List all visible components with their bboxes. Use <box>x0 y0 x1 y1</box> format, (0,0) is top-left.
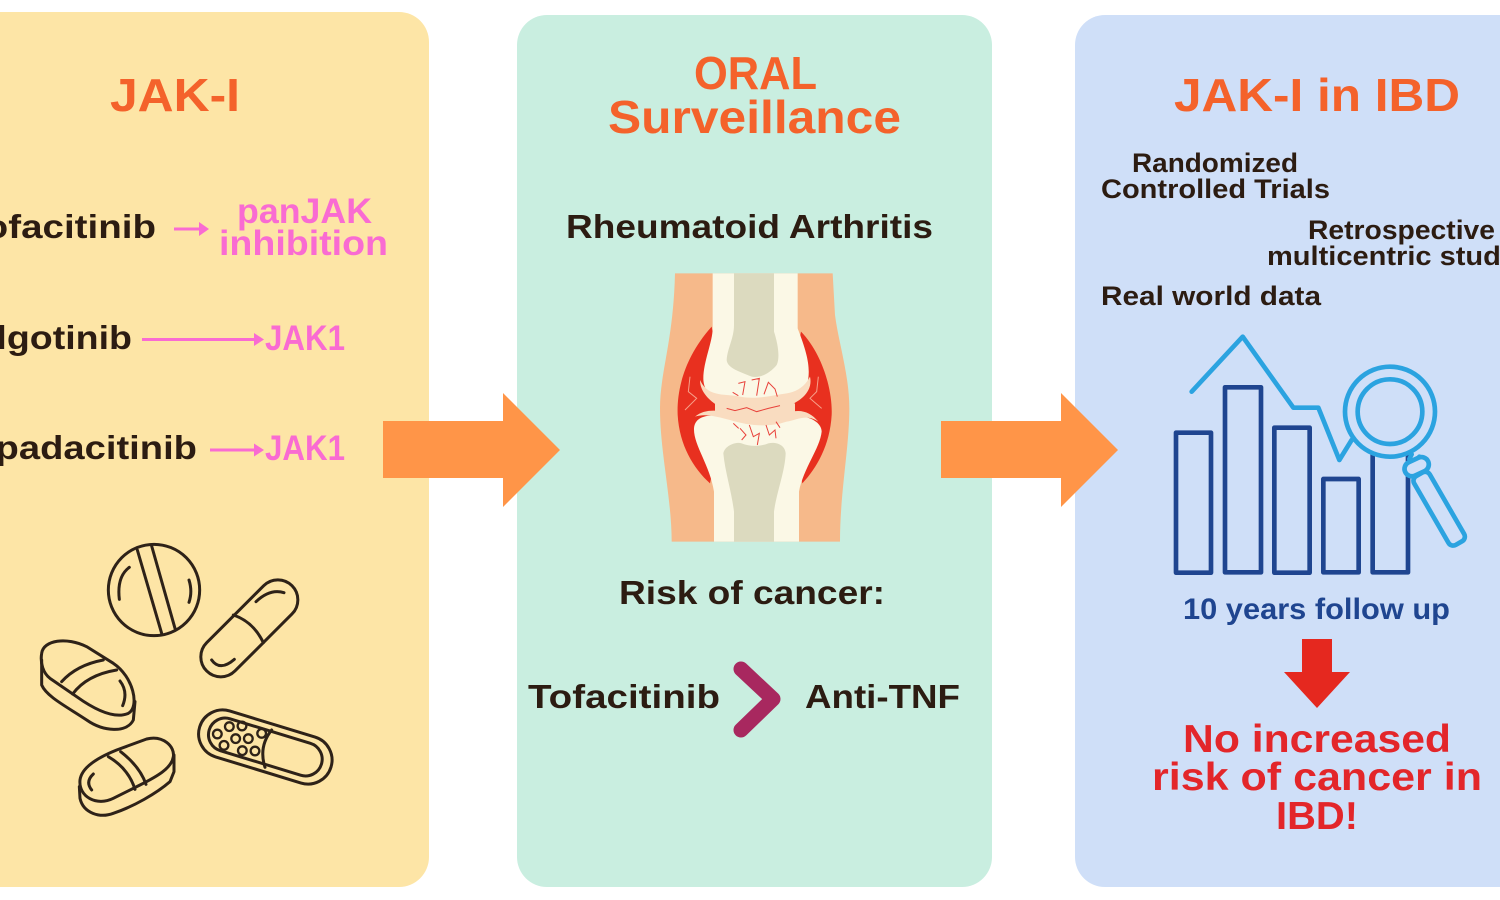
icon: bar chart with magnifier <box>1176 337 1467 573</box>
text: Risk of cancer: Risk of cancer: <box>619 574 885 611</box>
conclusion: No increased risk of cancer in IBD: No increased <box>1183 718 1451 761</box>
row: Upadacitinib JAK1: JAK1 <box>265 429 345 468</box>
heading: JAK-I: JAK-I <box>110 69 240 121</box>
text: Randomized Controlled Trials <box>1101 148 1330 204</box>
comparison: Tofacitinib greater than Anti-TNF: Anti-TNF <box>805 678 960 715</box>
conclusion: No increased risk of cancer in IBD <box>1152 718 1482 838</box>
subheading: Rheumatoid Arthritis: Rheumatoid Arthritis <box>566 208 933 245</box>
conclusion: No increased risk of cancer in IBD: IBD! <box>1276 795 1358 838</box>
panel: JAK-I <box>0 12 429 887</box>
text: Retrospective multicentric study: multicentric study <box>1267 241 1500 271</box>
arrow: down <box>1284 639 1350 708</box>
text: Real world data: Real world data <box>1101 281 1322 311</box>
row: Filgotinib JAK1: JAK1 <box>265 319 345 358</box>
conclusion: No increased risk of cancer in IBD: risk of cancer in <box>1152 756 1482 799</box>
heading: ORAL Surveillance <box>608 47 901 143</box>
heading: JAK-I in IBD: JAK-I in IBD <box>1174 69 1460 121</box>
icon: inflamed knee joint <box>660 273 849 542</box>
heading: ORAL Surveillance: ORAL <box>694 47 817 99</box>
row: Filgotinib JAK1 <box>0 319 345 358</box>
text: 10 years follow up: 10 years follow up <box>1183 593 1450 626</box>
text: Retrospective multicentric study: Retrospective <box>1308 215 1495 245</box>
row: Tofacitinib panJAK inhibition <box>0 192 388 263</box>
icon: pills <box>41 544 338 815</box>
arrow: ORAL to IBD <box>941 393 1118 507</box>
text: Retrospective multicentric study <box>1267 215 1500 271</box>
comparison: Tofacitinib greater than Anti-TNF: Tofacitinib <box>528 678 720 715</box>
row: Upadacitinib JAK1 <box>0 429 345 468</box>
row: Tofacitinib panJAK inhibition: inhibition <box>219 224 388 263</box>
text: Randomized Controlled Trials: Controlled Trials <box>1101 174 1330 204</box>
row: Tofacitinib panJAK inhibition: panJAK <box>237 192 372 231</box>
comparison: Tofacitinib greater than Anti-TNF <box>528 669 960 730</box>
panel: JAK-I in IBD <box>1075 15 1500 887</box>
arrow: JAK-I to ORAL <box>383 393 560 507</box>
panel: ORAL Surveillance <box>517 15 992 887</box>
text: Randomized Controlled Trials: Randomized <box>1132 148 1298 178</box>
heading: ORAL Surveillance: Surveillance <box>608 91 901 143</box>
